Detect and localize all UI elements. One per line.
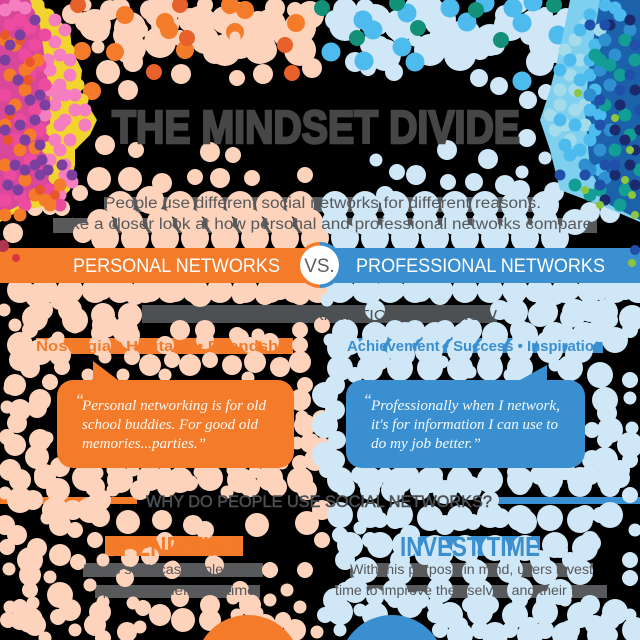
band: professional networks: PROFESSIONAL NETWORKS xyxy=(356,256,605,277)
intro text: People use different social networks for different reasons. xyxy=(104,195,541,212)
text halo bars behind dot pattern xyxy=(0,197,640,598)
callout: personal quote: school buddies. For good old xyxy=(82,417,258,433)
band: personal networks: PERSONAL NETWORKS xyxy=(73,256,280,277)
badge: vs: VS. xyxy=(304,256,335,277)
text: invest time description: time to improve themselves and their future xyxy=(335,583,607,598)
heading: invest time: INVEST TIME xyxy=(400,531,540,562)
heading: emotions: EMOTIONS DIFFER DRAMATICALLY BY ROW xyxy=(142,307,498,324)
callout: personal quote: Personal networking is for old xyxy=(81,398,266,414)
badge: vs xyxy=(297,242,343,288)
callout: professional quote xyxy=(346,365,585,468)
callout: personal quote: “ xyxy=(75,392,84,409)
icon: orange semicircle xyxy=(203,615,293,640)
title: THE MINDSET DIVIDE xyxy=(112,101,520,153)
callout: professional quote: Professionally when I network, xyxy=(370,398,560,414)
band: professional networks xyxy=(335,245,640,283)
heading: why do people use social networks: WHY DO PEOPLE USE SOCIAL NETWORKS? xyxy=(146,492,492,511)
icon: left head profile made of coloured dots xyxy=(0,0,97,222)
icon: blue semicircle xyxy=(347,615,437,640)
callout: personal quote: memories...parties.” xyxy=(82,436,206,452)
callout: personal quote xyxy=(57,361,294,468)
callout: professional quote: it's for information I can use to xyxy=(371,417,558,433)
text: invest time description: With this purpose in mind, users invest xyxy=(350,562,593,577)
label: personal emotions: Nostalgia • Heritage • Friendship xyxy=(36,338,293,355)
callout: professional quote: do my job better.” xyxy=(371,436,481,452)
icon: right head profile made of coloured dots xyxy=(540,0,640,222)
band: personal networks xyxy=(0,240,305,283)
callout: professional quote: “ xyxy=(363,392,372,409)
dot pattern: personal side peach xyxy=(4,5,322,638)
text: invest time description xyxy=(335,562,607,598)
intro text: Take a closer look at how personal and professional networks compare. xyxy=(53,216,597,233)
dot pattern: professional side light blue xyxy=(325,5,638,635)
intro text xyxy=(53,195,597,233)
text: spend time description xyxy=(83,562,263,598)
heading: spend time: SPEND TIME xyxy=(105,531,243,562)
text: spend time description: Users seek casual pleasure, xyxy=(83,562,263,577)
label: professional emotions: Achievement • Success • Inspiration xyxy=(347,338,603,355)
dot accents: blue and teal dots top right xyxy=(322,2,580,81)
text: spend time description: spending their free time. xyxy=(95,583,260,598)
dot accents: orange dots top left xyxy=(78,5,296,91)
